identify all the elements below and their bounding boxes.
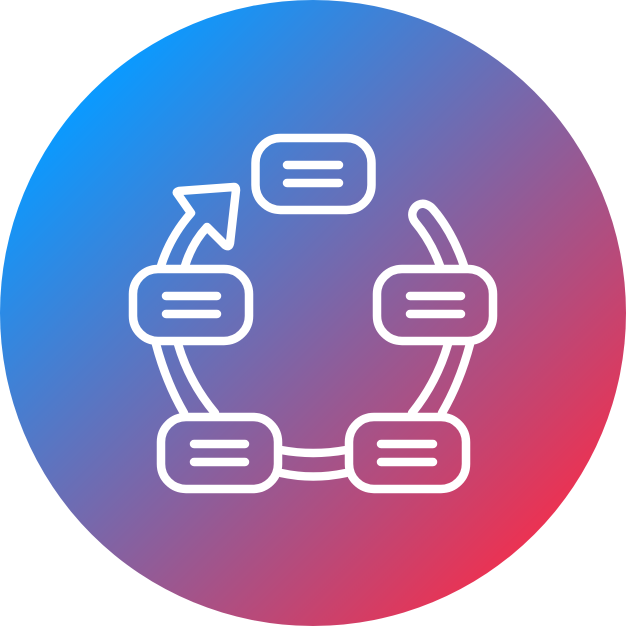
box: left <box>133 269 249 341</box>
box: bottom right <box>349 417 466 489</box>
cycle diagram <box>133 138 493 489</box>
box: right <box>377 269 493 341</box>
arrow: curved arrow from left box to top box <box>161 187 236 266</box>
arc: tail from top right to right box <box>412 204 464 266</box>
box: bottom left <box>161 417 278 489</box>
arc: link between bottom boxes <box>281 450 346 476</box>
box: top <box>256 138 372 210</box>
arc: left box to bottom left box <box>156 344 215 413</box>
arc: right box to bottom right box <box>412 344 470 413</box>
